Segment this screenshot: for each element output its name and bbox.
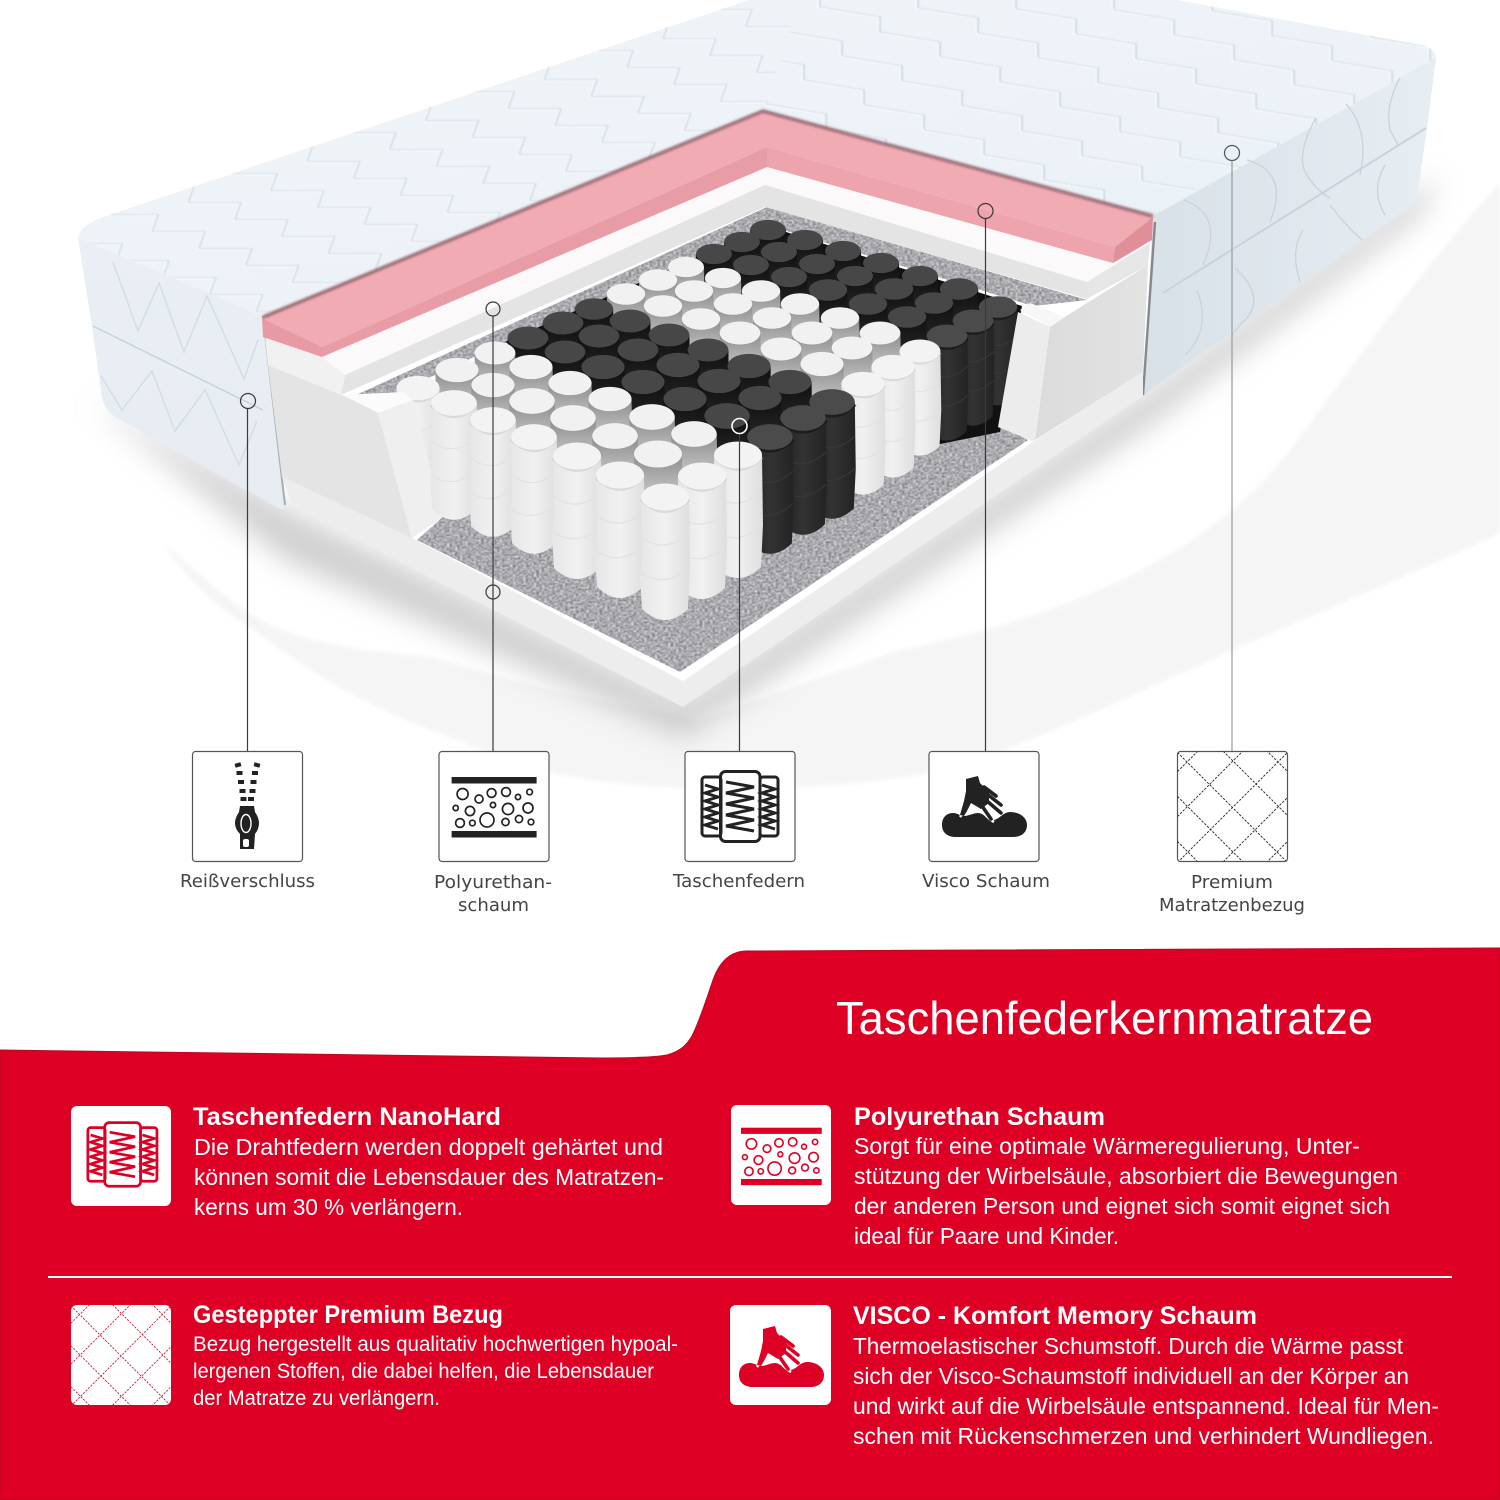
feature icon: pocket springs [685, 752, 795, 862]
quilted cover: top surface [78, 0, 1436, 318]
text block: Polyurethan Schaum: ideal für Paare und Kinder. [854, 1223, 1119, 1249]
text block: VISCO Komfort Memory Schaum [853, 1302, 1439, 1449]
text block: VISCO Komfort Memory Schaum: VISCO - Komfort Memory Schaum [853, 1302, 1257, 1330]
text block: Taschenfedern NanoHard: kerns um 30 % verlängern. [194, 1194, 463, 1220]
polyurethane foam top layer [265, 166, 1150, 395]
text block: Taschenfedern NanoHard: Die Drahtfedern werden doppelt gehärtet und [194, 1134, 663, 1160]
label: Reißverschluss: Reißverschluss [180, 871, 315, 892]
text block: Polyurethan Schaum [854, 1103, 1398, 1249]
pointer: Visco Schaum [978, 204, 993, 751]
dark spring backing [505, 226, 1022, 480]
right foam block [998, 265, 1148, 442]
text block: Gesteppter Premium Bezug: Bezug hergestellt aus qualitativ hochwertigen hypoal- [193, 1333, 678, 1356]
mattress illustration [78, 0, 1436, 707]
quilted cover: right side [1143, 58, 1436, 397]
text block: Taschenfedern NanoHard: können somit die Lebensdauer des Matratzen- [194, 1164, 664, 1190]
label: Polyurethanschaum: schaum [458, 895, 529, 916]
panel title: Taschenfederkernmatratze [836, 992, 1373, 1044]
text block: Polyurethan Schaum: Polyurethan Schaum [854, 1103, 1105, 1131]
panel icon: quilted cover [71, 1223, 171, 1487]
background swoosh [163, 183, 1500, 789]
text block: Polyurethan Schaum: der anderen Person und eignet sich somit eignet sich [854, 1193, 1390, 1219]
label: Taschenfedern: Taschenfedern [672, 871, 805, 892]
pointer: Polyurethanschaum [486, 302, 500, 751]
text block: Gesteppter Premium Bezug: der Matratze zu verlängern. [193, 1387, 440, 1410]
panel icon: pocket springs [71, 1106, 171, 1206]
pointer: Premium Matratzenbezug [1224, 146, 1240, 751]
red information panel [0, 948, 1500, 1500]
feature icon: visco foam hand [929, 752, 1039, 862]
panel icon: visco foam hand [730, 1305, 831, 1405]
text block: VISCO Komfort Memory Schaum: und wirkt auf die Wirbelsäule entspannend. Ideal für Men- [853, 1393, 1439, 1419]
text block: Gesteppter Premium Bezug [193, 1301, 678, 1410]
pointer: Reißverschluss [240, 394, 256, 751]
text block: Gesteppter Premium Bezug: lergenen Stoffen, die dabei helfen, die Lebensdauer [193, 1360, 654, 1383]
text block: Gesteppter Premium Bezug: Gesteppter Premium Bezug [193, 1301, 503, 1329]
quilted cover: left side [78, 238, 286, 510]
panel icon: polyurethane foam [731, 1105, 831, 1205]
left foam block [268, 365, 443, 538]
text block: Taschenfedern NanoHard: Taschenfedern NanoHard [193, 1103, 501, 1131]
pocket springs: rear row [396, 220, 787, 499]
text block: Polyurethan Schaum: stützung der Wirbelsäule, absorbiert die Bewegungen [854, 1163, 1398, 1189]
text block: VISCO Komfort Memory Schaum: Thermoelastischer Schumstoff. Durch die Wärme passt [853, 1333, 1404, 1359]
panel divider [48, 1276, 1452, 1278]
label: Premium Matratzenbezug: Premium [1191, 872, 1273, 893]
text block: Taschenfedern NanoHard [193, 1103, 664, 1220]
feature icon: polyurethane foam [439, 752, 549, 862]
mattress shadow [90, 175, 1440, 738]
foam base [282, 372, 1143, 707]
pocket springs: black and white rows [430, 230, 1018, 620]
feature icon: zipper [192, 752, 302, 862]
text block: VISCO Komfort Memory Schaum: schen mit Rückenschmerzen und verhindert Wundliegen. [853, 1423, 1434, 1449]
text block: Polyurethan Schaum: Sorgt für eine optimale Wärmeregulierung, Unter- [854, 1133, 1360, 1159]
feature icon: quilted cover [1178, 662, 1288, 952]
visco memory foam layer [262, 111, 1153, 357]
pointer: Taschenfedern [732, 418, 747, 751]
label: Premium Matratzenbezug: Matratzenbezug [1159, 895, 1305, 916]
felt layer: back [345, 207, 1087, 413]
text block: VISCO Komfort Memory Schaum: sich der Visco-Schaumstoff individuell an der Körper an [853, 1363, 1409, 1389]
label: Visco Schaum: Visco Schaum [922, 871, 1050, 892]
label: Polyurethanschaum: Polyurethan- [434, 872, 552, 893]
felt layer: bottom [417, 400, 1028, 672]
